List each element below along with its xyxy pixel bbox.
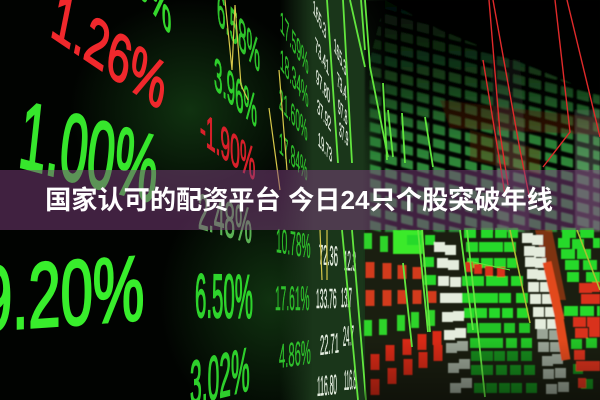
red percentage -1.90%: -1.90% [200,101,255,191]
green number column: 18.34% [280,43,308,116]
white number columns: 24.7 [343,321,354,353]
green number column: 4.86% [279,334,311,376]
lower right ticker cells [368,230,600,395]
white number columns: 37.92 [317,95,331,137]
green percentage 3.96%: 3.96% [214,47,257,138]
large green percentage 1.00%: 1.00% [15,82,164,224]
white number columns: 165.3 [334,33,346,82]
dark fade at bottom of ticker cells [365,340,600,400]
white number columns: 37.9 [339,118,348,152]
orange streak [547,262,566,360]
white number columns: 97.80 [316,66,330,109]
green number column: 10.78% [276,222,311,266]
bright green glow block [393,230,423,254]
green number column: 17.84% [279,124,307,188]
white cells [434,238,558,335]
white number columns: 72.36 [319,239,338,273]
red cells [370,262,432,306]
green chart lines [327,0,510,400]
green number column [275,4,311,376]
white number columns: 22.71 [320,328,339,362]
green percentage 2.48%: 2.48% [198,185,252,255]
green percentage 6.50%: 6.50% [195,261,253,331]
green number column: 17.61% [275,280,310,318]
title: 国家认可的配资平台 今日24只个股突破年线 [45,185,553,215]
yellow chart lines [225,0,600,323]
title banner [0,170,600,230]
white number columns: 133.76 [316,285,337,315]
white number columns: 13.7 [341,283,352,314]
white number columns: 19.73 [318,128,332,168]
red chart lines [483,0,600,200]
dim upper ticker cells [365,0,600,232]
green number column: 17.59% [280,4,308,83]
green number column: 21.60% [279,81,307,148]
white number columns: 12.3 [344,247,356,278]
white number columns: 73.41 [315,33,329,81]
red streak behind cells [535,230,566,300]
green narrow cells [368,233,431,336]
white number columns: 97.8 [338,95,347,131]
white number columns: 73.4 [337,68,346,106]
green cells [407,233,600,313]
white number columns: 116.8 [344,365,356,397]
white number columns [313,0,356,400]
